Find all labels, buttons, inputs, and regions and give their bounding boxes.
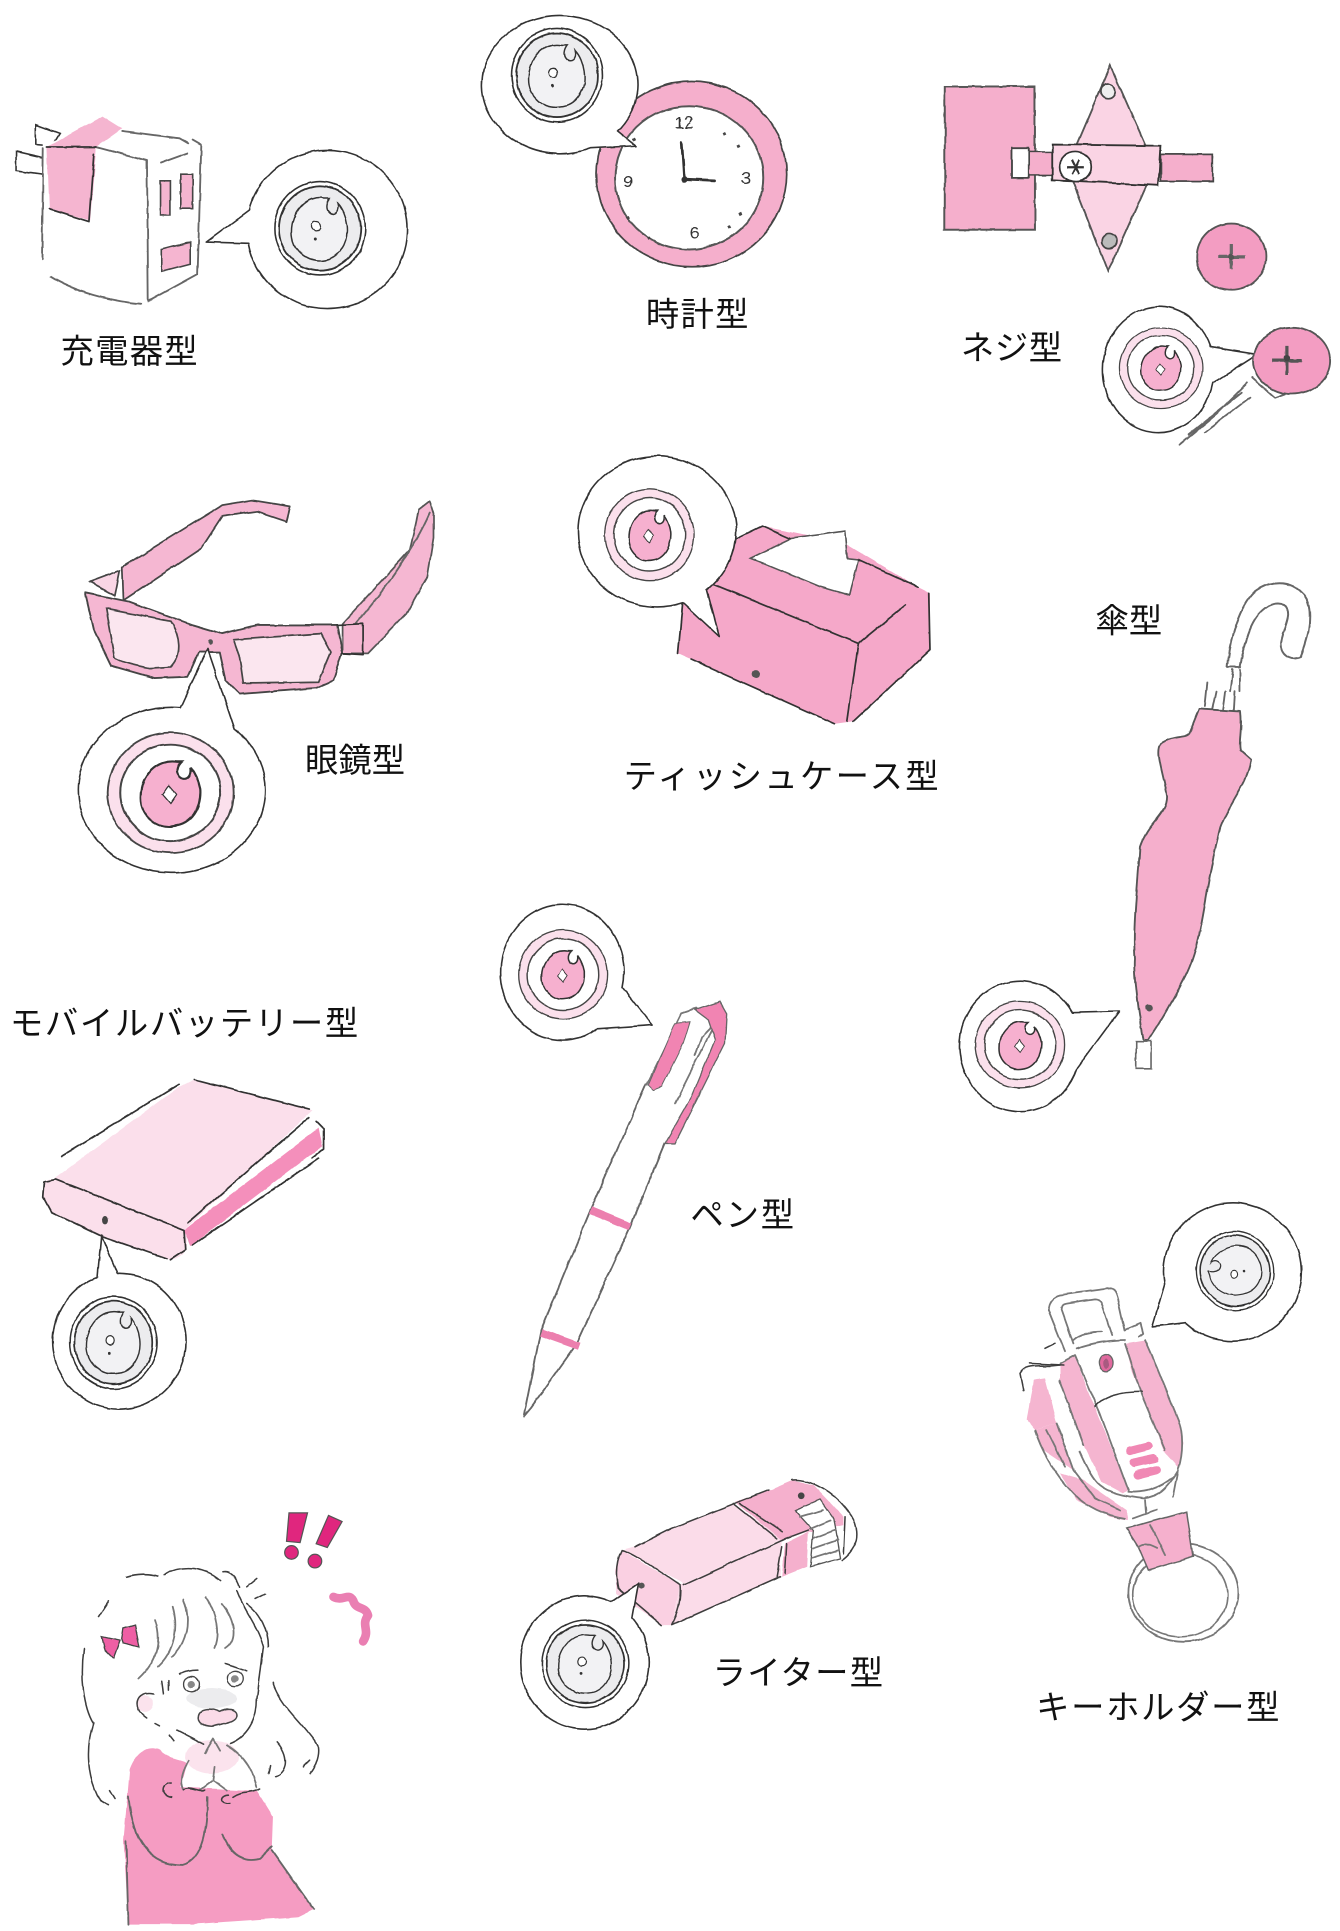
speech bubble: pen lens xyxy=(501,904,652,1040)
lens: lighter xyxy=(542,1620,629,1707)
speech bubble: charger lens xyxy=(206,150,408,309)
pen cap and clip xyxy=(647,1002,727,1143)
item: charger camera xyxy=(16,116,408,309)
clock: 3 xyxy=(741,168,751,188)
tissue box xyxy=(678,526,930,724)
umbrella xyxy=(1134,583,1310,1068)
item: screw camera xyxy=(945,65,1330,445)
item: clock camera xyxy=(482,15,787,267)
character: surprised girl xyxy=(82,1568,319,1924)
lens: screw xyxy=(1119,328,1202,409)
dress lines xyxy=(126,1797,314,1924)
screw close-up with motion lines xyxy=(1179,327,1330,445)
label: umbrella: 傘型 xyxy=(1095,603,1162,640)
hair bow xyxy=(102,1625,139,1658)
label: pen: ペン型 xyxy=(690,1197,794,1234)
speech bubble: umbrella lens xyxy=(959,981,1119,1112)
label: mobile battery: モバイルバッテリー型 xyxy=(10,1006,358,1043)
door latch xyxy=(945,65,1213,272)
clock: 12 xyxy=(674,112,694,132)
speech bubble: key holder lens xyxy=(1152,1203,1302,1341)
item: tissue box camera xyxy=(578,456,930,724)
label: lighter: ライター型 xyxy=(713,1656,883,1693)
pen xyxy=(524,1002,727,1417)
lens: key holder xyxy=(1185,1221,1285,1321)
speech bubble: tissue lens xyxy=(578,456,736,636)
speech bubble: glasses lens xyxy=(78,648,266,873)
lighter xyxy=(615,1480,857,1625)
label: clock: 時計型 xyxy=(646,297,748,334)
speech bubble: clock lens xyxy=(482,15,637,154)
exclamation marks xyxy=(285,1513,342,1568)
item: pen camera xyxy=(501,904,727,1417)
item: umbrella camera xyxy=(959,583,1310,1112)
label: charger: 充電器型 xyxy=(61,334,198,371)
speech bubble: battery lens xyxy=(53,1235,186,1409)
item: lighter camera xyxy=(520,1480,857,1729)
item: key holder camera xyxy=(1020,1203,1302,1642)
mobile battery xyxy=(43,1079,324,1260)
clock: 6 xyxy=(689,222,699,242)
lens: glasses xyxy=(108,733,233,853)
label: glasses: 眼鏡型 xyxy=(305,743,405,780)
screw head xyxy=(1197,224,1266,290)
lens: pen xyxy=(519,930,608,1019)
dress xyxy=(124,1748,314,1924)
speech bubble: lighter lens xyxy=(520,1583,649,1729)
clock xyxy=(597,82,787,267)
lens: tissue xyxy=(605,489,694,581)
charger body xyxy=(16,116,203,304)
lens: battery xyxy=(70,1297,157,1388)
clock: 9 xyxy=(624,172,633,192)
key holder xyxy=(1020,1288,1238,1642)
lens: charger xyxy=(274,182,365,275)
label: screw: ネジ型 xyxy=(961,330,1062,367)
lens: clock xyxy=(512,28,602,122)
lens: umbrella xyxy=(976,1001,1065,1088)
squiggle xyxy=(333,1597,368,1641)
glasses xyxy=(85,500,433,694)
label: key holder: キーホルダー型 xyxy=(1036,1690,1279,1727)
speech bubble: screw lens xyxy=(1103,307,1257,433)
item: mobile battery camera xyxy=(43,1079,324,1409)
label: tissue box: ティッシュケース型 xyxy=(624,759,939,796)
item: glasses camera xyxy=(78,500,433,873)
girl head, hair and hands xyxy=(82,1568,319,1805)
